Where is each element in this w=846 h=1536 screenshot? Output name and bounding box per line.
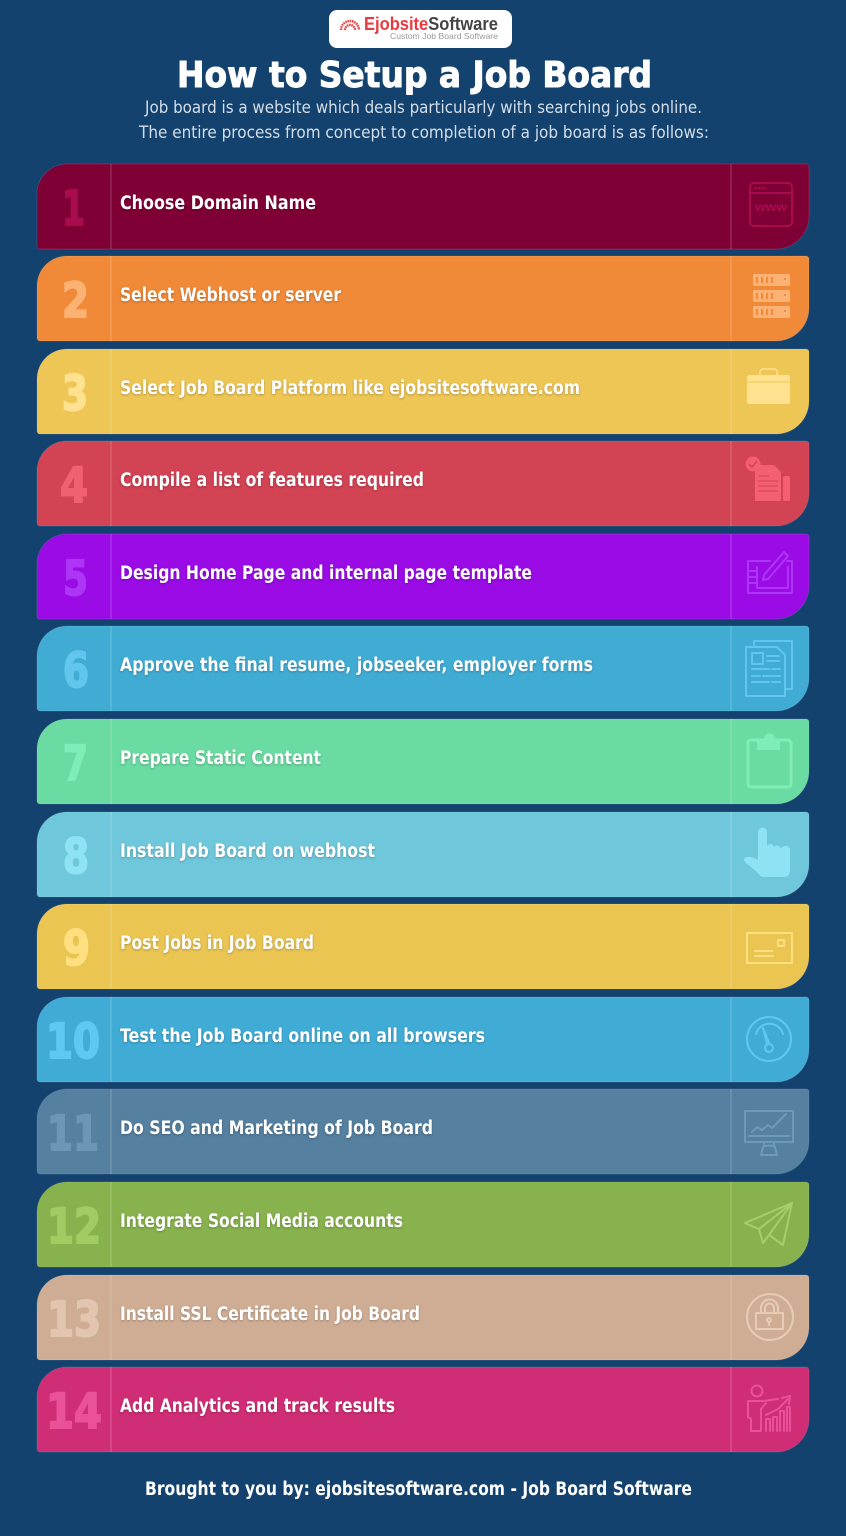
panel: step 1 xyxy=(37,164,809,249)
icon: pointing hand xyxy=(744,828,790,877)
step text: Select Webhost or server xyxy=(120,285,342,306)
step text: Add Analytics and track results xyxy=(120,1396,395,1417)
icon: documents xyxy=(746,641,792,696)
intro text xyxy=(138,98,709,142)
logo name: EjobsiteSoftware xyxy=(364,14,498,34)
step text: Install Job Board on webhost xyxy=(120,841,375,862)
icon: gauge xyxy=(747,1017,791,1061)
logo xyxy=(329,10,512,48)
number 3: 3 xyxy=(62,366,88,422)
number 4: 4 xyxy=(60,458,88,514)
icon: drawing tablet xyxy=(748,552,792,593)
icon: postcard xyxy=(747,933,792,963)
number 14: 14 xyxy=(46,1384,102,1440)
icon: browser www xyxy=(750,183,792,226)
step text: Test the Job Board online on all browsers xyxy=(120,1026,485,1047)
icon: briefcase xyxy=(747,369,790,404)
title: How to Setup a Job Board xyxy=(177,55,652,96)
step text: Install SSL Certificate in Job Board xyxy=(120,1304,420,1325)
icon: monitor chart xyxy=(745,1111,793,1155)
number 8: 8 xyxy=(63,829,89,885)
number 13: 13 xyxy=(47,1292,101,1348)
icon: server xyxy=(753,274,790,318)
panel: step 3 xyxy=(37,349,809,434)
number 7: 7 xyxy=(63,736,88,792)
panel: step 2 xyxy=(37,256,809,341)
number 1: 1 xyxy=(62,181,85,237)
number 6: 6 xyxy=(63,643,89,699)
step text: Prepare Static Content xyxy=(120,748,321,769)
icon: browser www: www xyxy=(754,200,788,214)
icon: document checklist xyxy=(746,456,790,501)
step text: Post Jobs in Job Board xyxy=(120,933,314,954)
panel: step 8 xyxy=(37,812,809,897)
step text: Compile a list of features required xyxy=(120,470,424,491)
icon: logo fan xyxy=(341,21,359,30)
panel: step 14 xyxy=(37,1367,809,1452)
number 2: 2 xyxy=(62,273,89,329)
panel: step 13 xyxy=(37,1275,809,1360)
icon: paper plane xyxy=(745,1203,792,1245)
logo tagline: Custom Job Board Software xyxy=(390,31,498,41)
number 12: 12 xyxy=(47,1199,101,1255)
number 11: 11 xyxy=(47,1106,99,1162)
step text: Approve the final resume, jobseeker, employer forms xyxy=(120,655,593,676)
footer credit: Brought to you by: ejobsitesoftware.com - Job Board Software xyxy=(145,1479,692,1500)
intro text: Job board is a website which deals particularly with searching jobs online. xyxy=(144,98,702,117)
number 10: 10 xyxy=(46,1014,100,1070)
number 9: 9 xyxy=(63,921,90,977)
panel: step 5 xyxy=(37,534,809,619)
icon: padlock xyxy=(747,1294,793,1340)
step text: Integrate Social Media accounts xyxy=(120,1211,403,1232)
panel: step 7 xyxy=(37,719,809,804)
step text: Do SEO and Marketing of Job Board xyxy=(120,1118,433,1139)
number 5: 5 xyxy=(63,551,88,607)
panel: step 10 xyxy=(37,997,809,1082)
step text: Design Home Page and internal page template xyxy=(120,563,532,584)
icon: clipboard xyxy=(748,734,791,787)
panel: step 11 xyxy=(37,1089,809,1174)
step text: Select Job Board Platform like ejobsitesoftware.com xyxy=(120,378,580,399)
step text: Choose Domain Name xyxy=(120,193,316,214)
panel: step 6 xyxy=(37,626,809,711)
intro text: The entire process from concept to completion of a job board is as follows: xyxy=(138,123,709,142)
icon: presenter with growth chart xyxy=(748,1386,790,1431)
panel: step 9 xyxy=(37,904,809,989)
panel: step 12 xyxy=(37,1182,809,1267)
panel: step 4 xyxy=(37,441,809,526)
